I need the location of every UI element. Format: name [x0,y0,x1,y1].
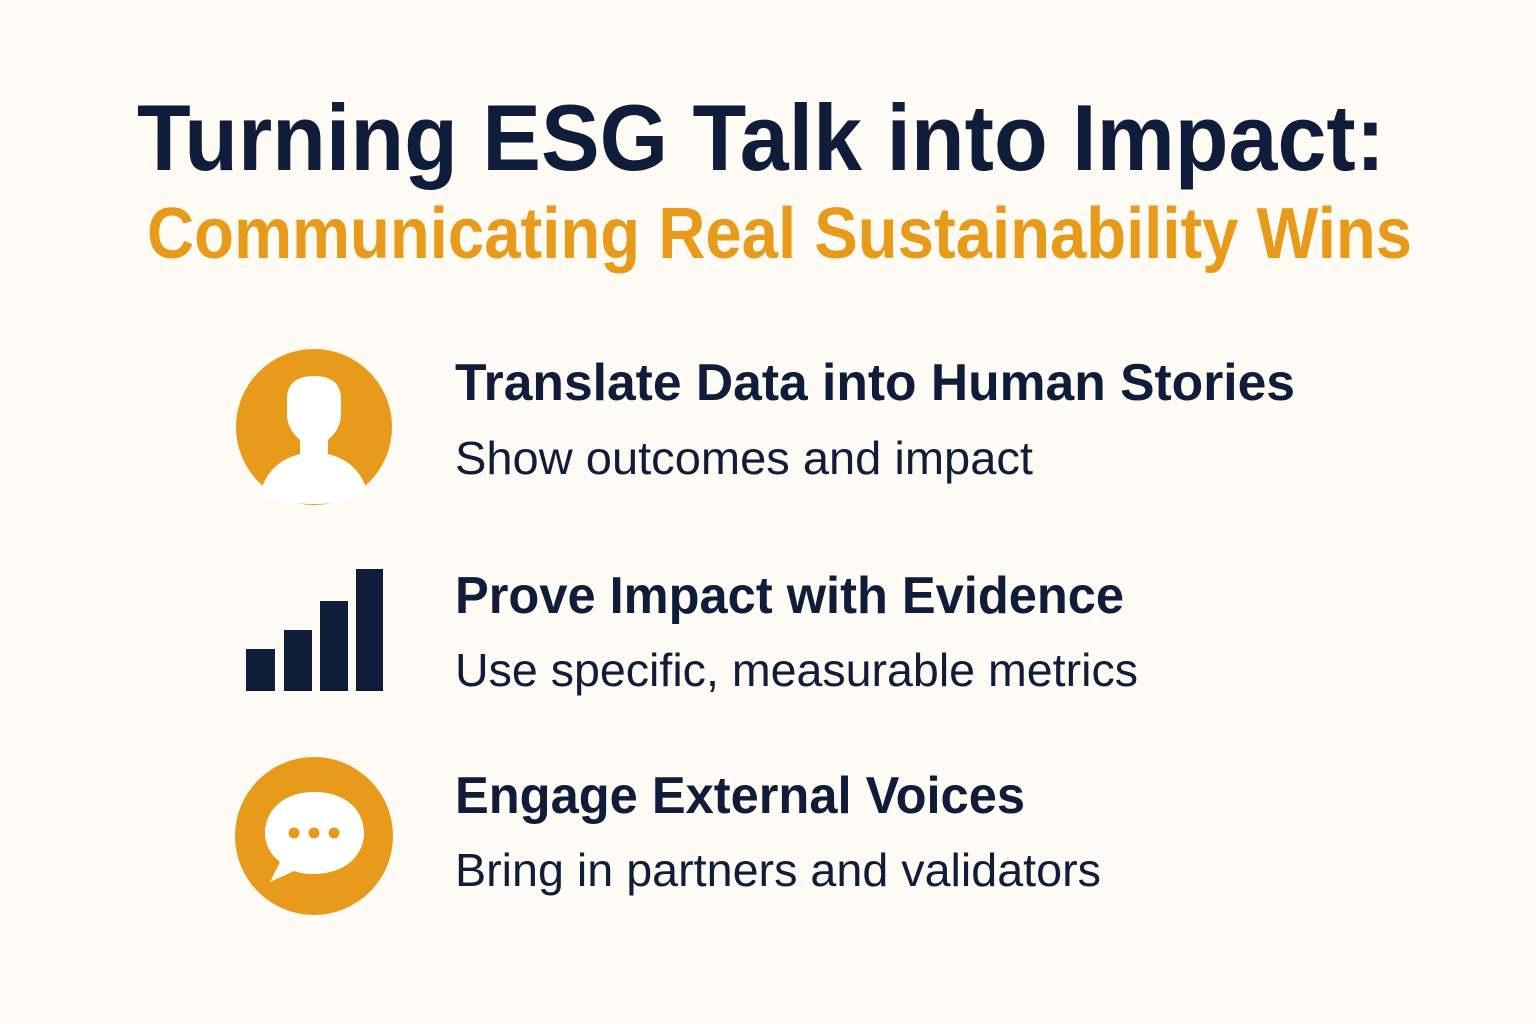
text 1: Show outcomes and impact [455,432,1033,484]
heading 3: Engage External Voices [455,767,1025,825]
subtitle: Communicating Real Sustainability Wins [147,194,1412,274]
icon: person [236,349,392,505]
heading 1: Translate Data into Human Stories [455,354,1295,412]
icon: chat bubble [235,757,393,915]
text 3: Bring in partners and validators [455,844,1101,896]
heading 2: Prove Impact with Evidence [455,567,1124,625]
title [137,85,1412,274]
item 1: human stories [236,349,1295,505]
title: Turning ESG Talk into Impact: [137,85,1385,190]
icon: bar chart [246,569,383,691]
item 2: evidence [246,567,1138,696]
text 2: Use specific, measurable metrics [455,644,1138,696]
item 3: external voices [235,757,1101,915]
